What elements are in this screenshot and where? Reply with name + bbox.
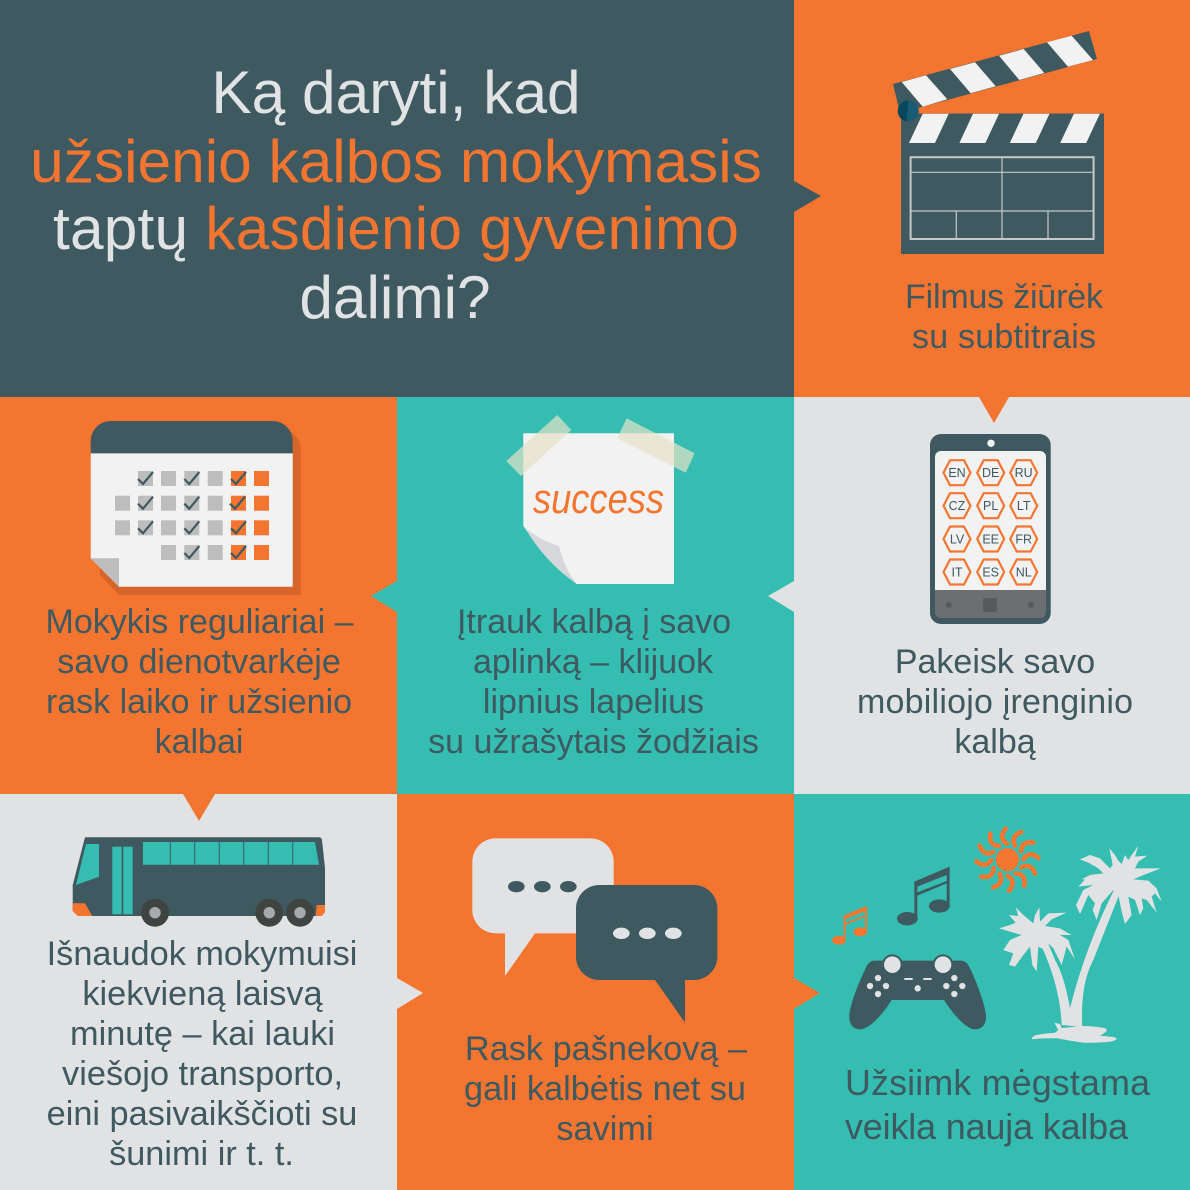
text: sticky notes: lipnius lapelius <box>483 683 704 721</box>
icon: calendar <box>91 421 301 595</box>
text: conversation: Rask pašnekovą – <box>465 1030 748 1068</box>
panel: bus <box>0 794 397 1190</box>
icon: smartphone: ES <box>982 565 999 579</box>
text: mobile device: kalbą <box>954 723 1036 761</box>
icon: orange music note <box>832 906 867 945</box>
text: calendar: kalbai <box>155 723 243 761</box>
icon: smartphone: NL <box>1016 565 1032 579</box>
text: sticky notes <box>428 603 759 761</box>
text: bus: minutę – kai lauki <box>70 1015 335 1053</box>
arrow: sticky notes to calendar <box>371 581 397 612</box>
text: films <box>905 278 1104 356</box>
text: sticky notes: su užrašytais žodžiais <box>428 723 759 761</box>
panel: title background <box>0 0 794 397</box>
arrow: mobile to sticky notes <box>768 581 794 612</box>
text: conversation <box>464 1030 748 1148</box>
title <box>30 58 762 331</box>
text: bus: eini pasivaikščioti su <box>47 1095 357 1133</box>
text: sticky notes: aplinką – klijuok <box>473 643 714 681</box>
title: užsienio kalbos mokymasis <box>30 127 762 195</box>
text: calendar: rask laiko ir užsienio <box>46 683 352 721</box>
text: calendar: Mokykis reguliariai – <box>46 603 354 641</box>
title: taptų kasdienio gyvenimo <box>53 194 739 262</box>
panel: mobile device <box>794 397 1190 794</box>
text: calendar <box>46 603 354 761</box>
text: mobile device: Pakeisk savo <box>895 643 1095 681</box>
icon: smartphone: FR <box>1015 532 1032 546</box>
icon: palm trees <box>999 846 1162 1043</box>
icon: smartphone: LV <box>950 532 965 546</box>
icon: smartphone: PL <box>983 499 998 513</box>
icon: sun <box>976 829 1038 891</box>
icon: bus <box>73 837 325 927</box>
text: bus: kiekvieną laisvą <box>82 975 324 1013</box>
arrow: title to films <box>794 181 821 212</box>
text: mobile device: mobiliojo įrenginio <box>857 683 1133 721</box>
text: success: success <box>533 475 664 522</box>
text: films: Filmus žiūrėk <box>905 278 1104 316</box>
icon: smartphone: EE <box>982 532 999 546</box>
text: films: su subtitrais <box>912 318 1096 356</box>
panel: conversation <box>397 794 794 1190</box>
icon: speech bubbles <box>472 838 717 1023</box>
panel: sticky notes <box>397 397 794 794</box>
arrow: bus to conversation <box>397 978 423 1009</box>
text: hobbies: veikla nauja kalba <box>845 1107 1128 1147</box>
icon: film clapperboard <box>893 31 1104 254</box>
title: dalimi? <box>299 263 491 331</box>
text: conversation: gali kalbėtis net su <box>464 1070 746 1108</box>
icon: smartphone: EN <box>948 466 966 480</box>
panel: films <box>794 0 1190 397</box>
arrow: films to mobile <box>979 397 1009 423</box>
text: bus: Išnaudok mokymuisi <box>47 935 357 973</box>
icon: game controller <box>849 954 986 1029</box>
text: hobbies: Užsiimk mėgstama <box>845 1063 1150 1103</box>
panel: hobbies <box>794 794 1190 1190</box>
title: Ką daryti, kad <box>211 58 581 126</box>
panel: calendar <box>0 397 397 794</box>
text: hobbies <box>845 1063 1150 1147</box>
text: conversation: savimi <box>556 1110 654 1148</box>
icon: smartphone: DE <box>982 466 999 480</box>
text: bus <box>47 935 357 1173</box>
icon: smartphone: LT <box>1017 499 1031 513</box>
icon: smartphone: RU <box>1015 466 1033 480</box>
text: calendar: savo dienotvarkėje <box>57 643 341 681</box>
icon: smartphone: IT <box>951 565 963 579</box>
icon: hobbies <box>832 829 1162 1043</box>
icon: dark music note <box>897 867 950 925</box>
text: mobile device <box>857 643 1133 761</box>
icon: smartphone: CZ <box>949 499 966 513</box>
text: bus: viešojo transporto, <box>62 1055 343 1093</box>
arrow: conversation to hobbies <box>794 978 820 1009</box>
text: sticky notes: Įtrauk kalbą į savo <box>457 603 731 641</box>
icon: sticky note <box>506 415 695 584</box>
text: bus: šunimi ir t. t. <box>109 1135 294 1173</box>
icon: smartphone <box>930 434 1051 624</box>
arrow: calendar to bus <box>183 794 215 821</box>
